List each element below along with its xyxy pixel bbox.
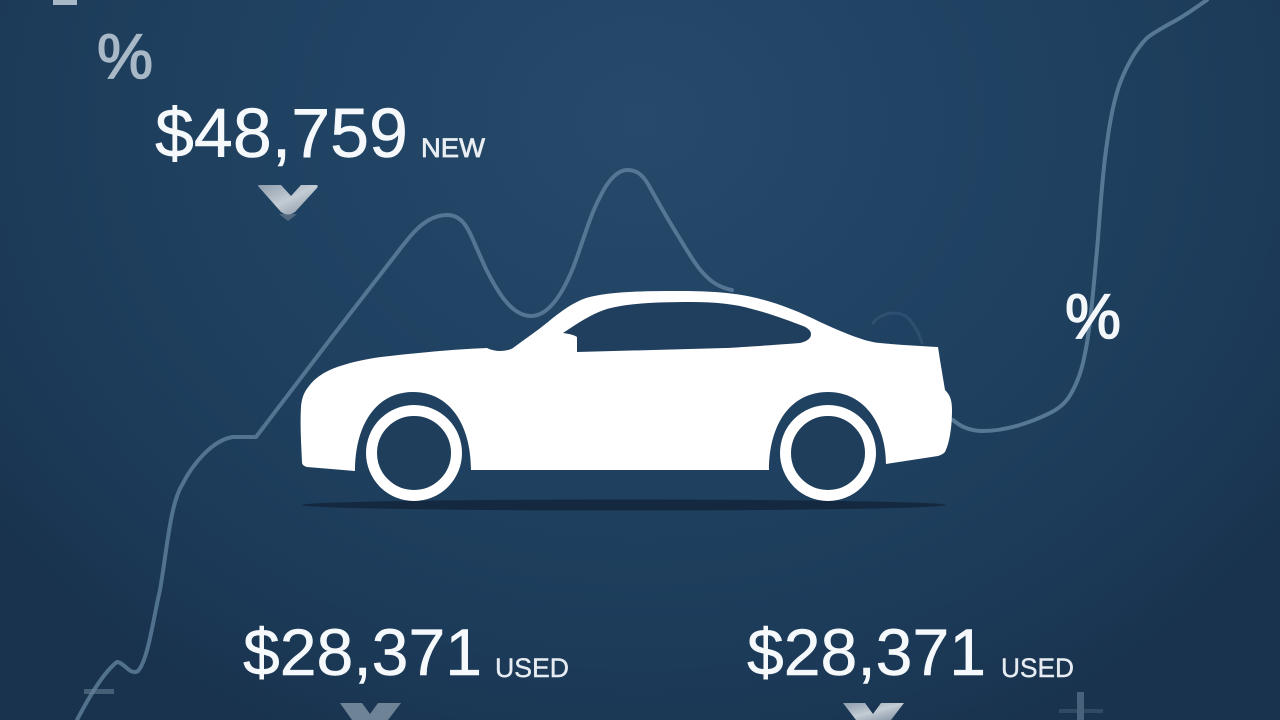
rear wheel xyxy=(786,410,870,496)
new car price: NEW xyxy=(421,133,486,163)
faint plus marker bottom right xyxy=(1059,692,1103,720)
car window xyxy=(563,302,811,352)
small axis tick top left xyxy=(53,0,77,5)
percent sign top left: % xyxy=(97,22,153,92)
faint axis tick bottom left xyxy=(84,689,114,694)
front wheel xyxy=(372,410,456,496)
used car price right: $28,371 xyxy=(747,615,986,689)
used car price right: USED xyxy=(1001,653,1074,683)
car body xyxy=(301,291,952,471)
percent sign right: % xyxy=(1065,282,1121,352)
car shadow xyxy=(302,500,946,510)
car silhouette xyxy=(301,291,952,510)
used car price left: USED xyxy=(495,653,569,683)
new car price: $48,759 xyxy=(155,94,408,172)
chevron under right used price xyxy=(843,703,904,720)
chevron under left used price xyxy=(340,703,401,720)
used car price left: $28,371 xyxy=(243,615,482,689)
chevron under new price xyxy=(258,185,318,221)
